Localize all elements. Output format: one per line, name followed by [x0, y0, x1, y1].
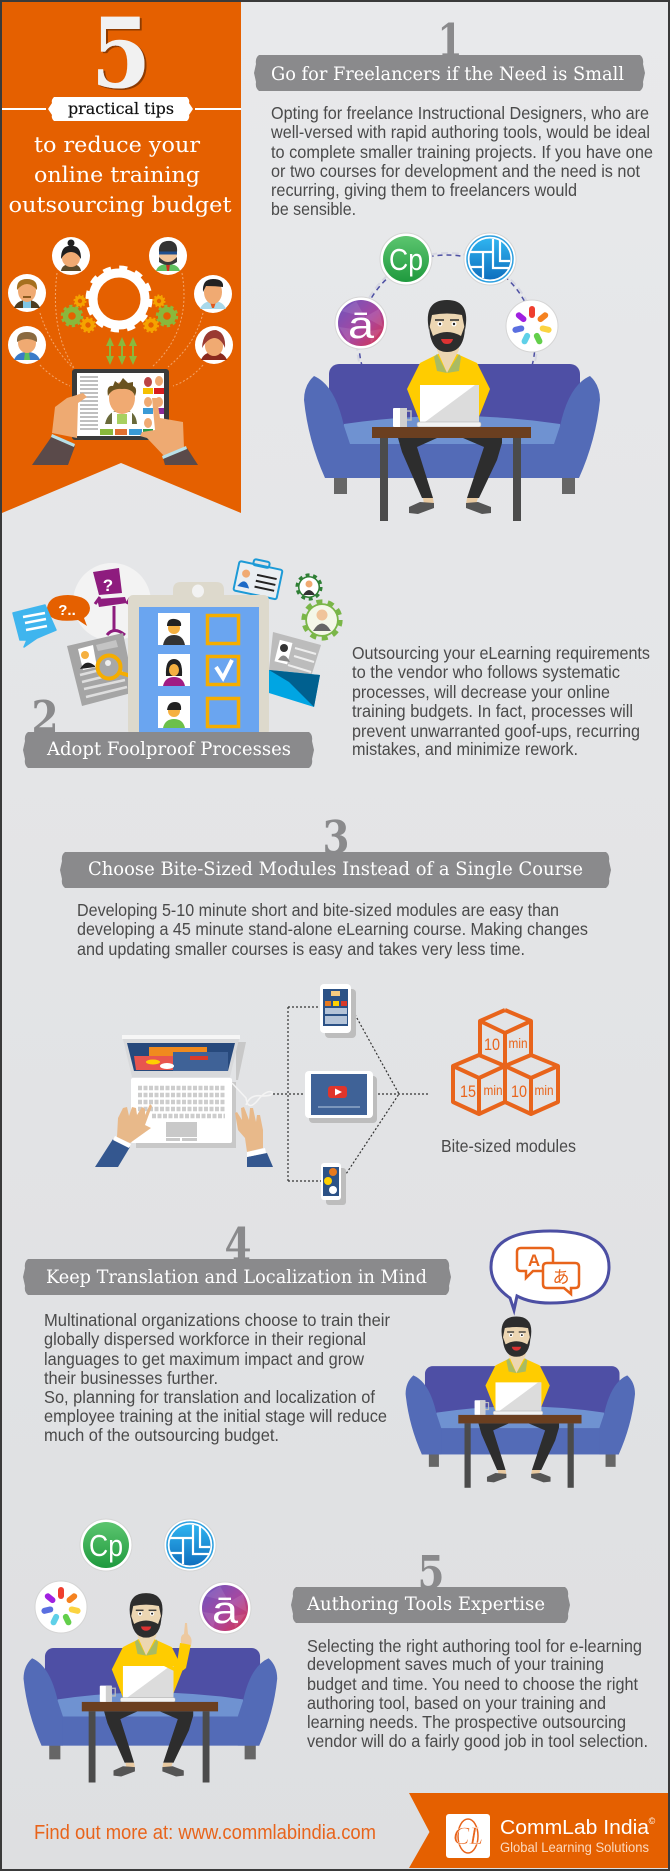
avatar: woman red hair [195, 326, 233, 364]
dashed arc linking tools [357, 253, 537, 433]
heading banner 5: Authoring Tools Expertise [306, 1593, 545, 1615]
text block: tip 3: developing a 45 minute stand-alone eLearning course. Making changes [77, 919, 588, 939]
text block: tip 5: authoring tool, based on your training and [307, 1693, 606, 1713]
CL logo: CL [453, 1823, 483, 1850]
text block: tip 2: prevent unwarranted goof-ups, recurring [352, 721, 640, 741]
orange question bubble: ?.. [58, 602, 76, 619]
tablet with video [305, 1071, 377, 1123]
text block: tip 5 [307, 1636, 648, 1751]
ID badge [233, 556, 284, 599]
text block: tip 4: So, planning for translation and localization of [44, 1387, 375, 1407]
brand name: CommLab India [500, 1817, 650, 1839]
icon: Adobe Captivate, section 5: Cp [89, 1528, 123, 1563]
person on sofa, section 4 [406, 1316, 635, 1488]
footer link text: Find out more at: www.commlabindia.com [34, 1822, 376, 1844]
text block: tip 5: development saves much of your training [307, 1654, 604, 1674]
practical tips pill [2, 97, 241, 121]
heading banner 2: Adopt Foolproof Processes [46, 738, 291, 760]
phone with course page [320, 984, 356, 1038]
icon: Lectora [464, 233, 516, 285]
text block: tip 3: Developing 5-10 minute short and bite-sized modules are easy than [77, 900, 559, 920]
small phone with bubbles [321, 1163, 346, 1205]
avatar: man with moustache [8, 274, 46, 312]
avatar: man blue shirt [8, 326, 46, 364]
gears with people [297, 575, 340, 638]
speech bubble with translation icon [491, 1231, 609, 1310]
text block: tip 4 [44, 1310, 390, 1445]
title text: outsourcing budget [8, 193, 232, 218]
heading banner 5 [291, 1587, 570, 1623]
resume with magnifier [67, 633, 147, 706]
big number 5: 5 [91, 0, 151, 110]
resume and envelope [269, 632, 321, 707]
heading banner 2 [23, 732, 314, 768]
bite-sized module cubes: 10 [511, 1082, 527, 1101]
registered mark: © [649, 1816, 656, 1826]
bite-sized module cubes [453, 1010, 558, 1114]
clipboard [128, 582, 269, 735]
heading banner 1 [254, 55, 645, 91]
title text: online training [34, 163, 200, 188]
text block: tip 4: much of the outsourcing budget. [44, 1425, 279, 1445]
applicant rows [158, 613, 190, 728]
icon: Articulate, section 5: ā [212, 1590, 239, 1632]
bite-sized module cubes: min [508, 1035, 528, 1051]
bite-sized module cubes: 15 [460, 1082, 476, 1101]
text block: tip 2: mistakes, and minimize rework. [352, 739, 578, 759]
text block: tip 1: recurring, giving them to freelancers would [271, 180, 577, 200]
text block: tip 1: be sensible. [271, 199, 356, 219]
raised arm [160, 1643, 191, 1672]
raised hand [181, 1623, 192, 1645]
text block: tip 2: training budgets. In fact, processes will [352, 701, 633, 721]
bite-sized module cubes: min [484, 1082, 502, 1098]
speech bubble with translation icon: A [528, 1251, 540, 1270]
caption: bite-sized modules: Bite-sized modules [441, 1136, 576, 1156]
heading banner 4: Keep Translation and Localization in Mind [46, 1266, 427, 1288]
number 2: 2 [32, 691, 58, 744]
icon: iSpring, section 5 [35, 1581, 87, 1633]
dotted connectors [273, 1007, 429, 1181]
speech bubble with translation icon: あ [552, 1263, 570, 1288]
chair in circle [73, 563, 151, 641]
person on sofa [304, 300, 600, 521]
bite-sized module cubes: min [534, 1082, 554, 1098]
number 1: 1 [438, 14, 462, 67]
laptop with hands [95, 1035, 273, 1167]
text block: tip 3: and updating smaller courses is easy and takes very less time. [77, 939, 525, 959]
text block: tip 2: processes, will decrease your online [352, 682, 610, 702]
text block: tip 3 [77, 900, 588, 959]
CL logo [446, 1814, 490, 1858]
icon: Articulate [335, 297, 387, 349]
text block: tip 4: their businesses further. [44, 1368, 218, 1388]
number 5: 5 [418, 1546, 444, 1599]
chair in circle: ? [103, 576, 113, 595]
icon: Articulate: ā [348, 305, 375, 347]
text block: tip 1: well-versed with rapid authoring tools, would be ideal [270, 122, 650, 142]
heading banner 1: Go for Freelancers if the Need is Small [271, 63, 624, 85]
title text: to reduce your [34, 133, 201, 158]
text block: tip 4: employee training at the initial stage will reduce [44, 1406, 387, 1426]
icon: Articulate, section 5 [199, 1582, 251, 1634]
heading banner 3: Choose Bite-Sized Modules Instead of a Single Course [88, 858, 583, 880]
text block: tip 4: globally dispersed workforce in their regional [44, 1329, 366, 1349]
text block: tip 5: vendor will do a fairly good job in tool selection. [307, 1731, 648, 1751]
heading banner 4 [23, 1259, 451, 1295]
text block: tip 4: languages to get maximum impact and grow [44, 1349, 364, 1369]
connecting dashed curves [40, 273, 203, 386]
illustration: process clipboard [13, 556, 340, 735]
text block: tip 1: or two courses for development and the need is not [271, 161, 640, 181]
orange question bubble [47, 595, 90, 626]
person on sofa pointing up, section 5 [24, 1593, 277, 1782]
heading banner 3 [60, 852, 611, 888]
icon: Adobe Captivate [380, 233, 432, 285]
icon: Adobe Captivate: Cp [389, 242, 423, 277]
number 3: 3 [322, 811, 350, 864]
icon: Lectora, section 5 [164, 1519, 216, 1571]
footer logo panel [409, 1793, 668, 1868]
avatar: woman with bun [52, 237, 90, 275]
gears [62, 268, 177, 332]
green arrows [106, 337, 137, 365]
tablet with hands [32, 369, 198, 465]
text block: tip 1: to complete smaller training projects. If you have one [271, 142, 653, 162]
avatar: man dark hair [194, 275, 232, 313]
text block: tip 4: Multinational organizations choose to train their [44, 1310, 390, 1330]
text block: tip 5: Selecting the right authoring tool for e-learning [307, 1636, 642, 1656]
check boxes [208, 616, 238, 726]
avatar: man with glasses [149, 237, 187, 275]
icon: iSpring [506, 300, 558, 352]
title text [8, 133, 232, 218]
blue message bubble [13, 605, 56, 647]
text block: tip 2: Outsourcing your eLearning requirements [352, 643, 650, 663]
text block: tip 1: Opting for freelance Instructional Designers, who are [271, 103, 649, 123]
text block: tip 5: learning needs. The prospective outsourcing [307, 1712, 626, 1732]
text block: tip 1 [270, 103, 653, 219]
icon: Adobe Captivate, section 5 [80, 1519, 132, 1571]
bite-sized module cubes: 10 [484, 1035, 500, 1054]
panel: orange title ribbon [2, 0, 241, 513]
text block: tip 2: to the vendor who follows systematic [352, 662, 620, 682]
text block: tip 5: budget and time. You need to choose the right [307, 1674, 638, 1694]
practical tips pill: practical tips [68, 100, 174, 118]
text block: tip 2 [352, 643, 650, 759]
tagline: Global Learning Solutions [500, 1839, 649, 1855]
number 4: 4 [224, 1218, 252, 1271]
